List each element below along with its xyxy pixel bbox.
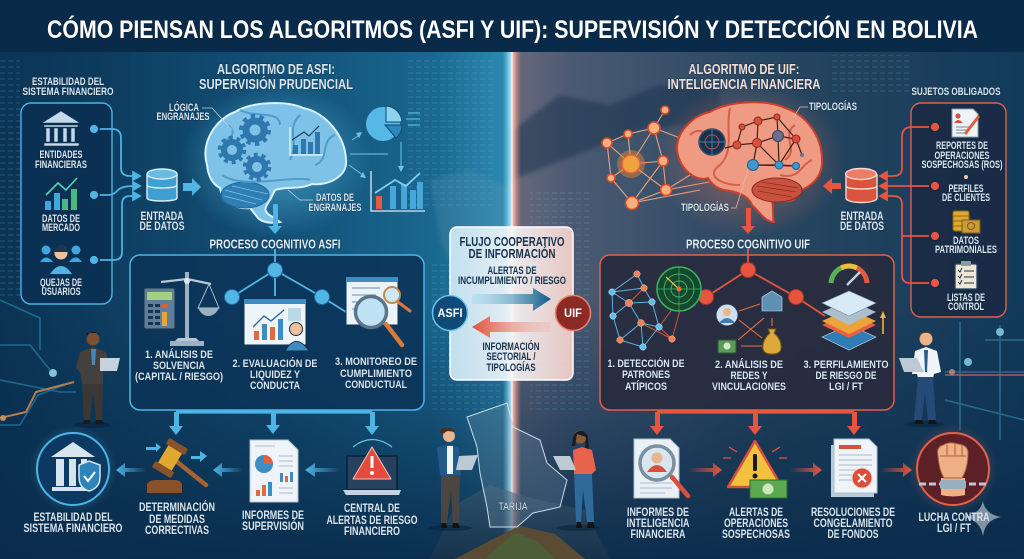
background: left blue half bbox=[0, 0, 512, 559]
label: central de alertas bbox=[326, 501, 418, 538]
heading: algoritmo de ASFI: ALGORITMO DE ASFI: bbox=[217, 62, 335, 78]
arrows: process to outputs ASFI bbox=[169, 412, 379, 435]
arrows: flow leftwards ASFI bbox=[116, 463, 340, 477]
icon: warning with banknote bbox=[723, 441, 787, 498]
title band bbox=[0, 0, 1024, 52]
icon: gears bbox=[220, 116, 270, 180]
label: informes de inteligencia: FINANCIERA bbox=[630, 527, 686, 541]
panel: proceso cognitivo UIF bbox=[600, 249, 894, 410]
label: evaluación de liquidez: LIQUIDEZ Y bbox=[250, 369, 301, 381]
label: listas de control bbox=[947, 292, 985, 313]
label: perfiles de clientes: PERFILES bbox=[948, 183, 984, 195]
label: detección de patrones: PATRONES bbox=[622, 369, 670, 381]
panel: flujo cooperativo de información: FLUJO COOPERATIVO bbox=[460, 235, 565, 249]
label: lucha contra LGI / FT bbox=[918, 510, 990, 535]
label: informes de supervisión: SUPERVISIÓN bbox=[242, 518, 304, 533]
label: datos de engranajes bbox=[308, 192, 362, 214]
arrows: process to outputs UIF bbox=[650, 412, 861, 435]
label: listas de control: LISTAS DE bbox=[947, 292, 985, 304]
label: perfilamiento de riesgo: 3. PERFILAMIENTO bbox=[804, 359, 889, 371]
label: perfiles de clientes bbox=[942, 183, 990, 204]
panel: flujo cooperativo de información: INCUMPLIMIENTO / RIESGO bbox=[458, 275, 566, 287]
icon: radar bbox=[699, 129, 725, 155]
brain: UIF bbox=[655, 82, 845, 238]
map: Bolivia outline with Tarija: TARIJA bbox=[498, 501, 528, 513]
arrow: database to brain UIF bbox=[823, 178, 841, 194]
label: resoluciones de congelamiento: DE FONDOS bbox=[828, 527, 878, 541]
icon: checklist clipboard bbox=[955, 261, 977, 289]
label: listas de control: CONTROL bbox=[948, 301, 984, 313]
label: estabilidad del sistema financiero bbox=[24, 510, 122, 535]
heading: algoritmo de ASFI: SUPERVISIÓN PRUDENCIAL bbox=[199, 75, 353, 93]
label: detección de patrones: ATÍPICOS bbox=[625, 380, 667, 393]
badge: ASFI bbox=[432, 296, 468, 330]
label: reportes de operaciones sospechosas: OPERACIONES bbox=[934, 150, 990, 162]
label: datos patrimoniales bbox=[935, 235, 997, 256]
label: quejas de usuarios bbox=[40, 277, 82, 298]
label: reportes de operaciones sospechosas: REPORTES DE bbox=[936, 140, 988, 152]
background: Bolivia silhouette upper bbox=[430, 170, 515, 300]
label: quejas de usuarios: QUEJAS DE bbox=[40, 277, 82, 289]
label: alertas de operaciones: SOSPECHOSAS bbox=[722, 527, 790, 541]
badge: ASFI: ASFI bbox=[438, 306, 462, 320]
map: Bolivia outline with Tarija bbox=[467, 403, 567, 527]
icon: database UIF bbox=[846, 168, 877, 202]
panel: proceso cognitivo ASFI bbox=[130, 249, 424, 410]
label: lucha contra LGI / FT: LGI / FT bbox=[937, 521, 972, 535]
label: determinación de medidas correctivas: DE MEDIDAS bbox=[149, 512, 205, 526]
label: detección de patrones bbox=[608, 357, 684, 393]
panel: flujo cooperativo de información: ALERTAS DE bbox=[488, 265, 536, 277]
icon: woman analyst ASFI bbox=[428, 428, 478, 531]
label: entrada de datos UIF bbox=[840, 209, 884, 233]
icon: network pattern and radar bbox=[609, 267, 701, 350]
arrow: brain to process ASFI bbox=[268, 204, 282, 234]
badge: UIF: UIF bbox=[564, 306, 582, 320]
icon: market chart bbox=[45, 178, 77, 210]
label: evaluación de liquidez: 2. EVALUACIÓN DE bbox=[232, 357, 318, 370]
icon: users bbox=[40, 245, 82, 274]
panel: fuentes ASFI bbox=[21, 103, 112, 304]
label: informes de inteligencia: INTELIGENCIA bbox=[626, 516, 690, 530]
background: faint data grids bbox=[0, 55, 910, 410]
network: brain nodes bbox=[725, 114, 804, 170]
label: determinación de medidas correctivas: CORRECTIVAS bbox=[145, 523, 209, 537]
label: análisis de redes: VINCULACIONES bbox=[712, 381, 786, 393]
background: left circuit lines bbox=[0, 300, 76, 425]
label: entrada de datos UIF: DE DATOS bbox=[840, 219, 884, 233]
background: mountain landscape bbox=[430, 485, 610, 559]
label: tipologías upper: TIPOLOGÍAS bbox=[809, 100, 857, 113]
background: right red-slate half bbox=[512, 0, 1024, 559]
label: análisis de redes bbox=[712, 358, 786, 393]
label: datos de engranajes: DATOS DE bbox=[316, 192, 354, 204]
heading: algoritmo de UIF: ALGORITMO DE UIF: bbox=[688, 62, 800, 78]
label: evaluación de liquidez: CONDUCTA bbox=[250, 380, 300, 392]
label: análisis de solvencia: SOLVENCIA bbox=[153, 360, 205, 372]
label: perfiles de clientes: DE CLIENTES bbox=[942, 192, 990, 204]
label: estabilidad del sistema financiero: SISTEMA FINANCIERO bbox=[24, 521, 122, 535]
icon: gavel bbox=[146, 438, 207, 493]
icon: report document bbox=[952, 109, 979, 137]
label: monitoreo de cumplimiento bbox=[335, 356, 417, 391]
arrow: brain to process UIF bbox=[741, 208, 755, 234]
icon: monitoring window and magnifiers bbox=[346, 277, 410, 345]
label: perfilamiento de riesgo: LGI / FT bbox=[829, 381, 863, 393]
label: análisis de solvencia bbox=[135, 348, 223, 383]
label: entidades financieras bbox=[35, 149, 87, 171]
badge: UIF bbox=[556, 296, 590, 330]
label: perfilamiento de riesgo: DE RIESGO DE bbox=[816, 370, 876, 382]
heading: algoritmo de UIF: INTELIGENCIA FINANCIERA bbox=[668, 77, 821, 93]
label: datos de mercado: MERCADO bbox=[42, 222, 80, 234]
label: tipologías lower: TIPOLOGÍAS bbox=[681, 201, 729, 214]
label: análisis de solvencia: (CAPITAL / RIESGO) bbox=[135, 371, 223, 383]
connector: process nodes bbox=[224, 249, 346, 312]
label: resoluciones de congelamiento bbox=[811, 505, 895, 541]
label: evaluación de liquidez bbox=[232, 357, 318, 392]
label: monitoreo de cumplimiento: CUMPLIMIENTO bbox=[340, 368, 412, 380]
icon: stability shield circle bbox=[29, 425, 117, 513]
label: entrada de datos ASFI: ENTRADA bbox=[140, 209, 184, 223]
heading: estabilidad del sistema financiero bbox=[22, 76, 114, 98]
label: estabilidad del sistema financiero: ESTABILIDAD DEL bbox=[34, 510, 112, 524]
icon: growth chart bbox=[349, 132, 425, 211]
icon: network links analysis bbox=[716, 291, 782, 354]
label: central de alertas: CENTRAL DE bbox=[344, 501, 400, 515]
label: entrada de datos UIF: ENTRADA bbox=[840, 209, 884, 223]
label: lógica engranajes: LÓGICA bbox=[169, 101, 199, 114]
label: lucha contra LGI / FT: LUCHA CONTRA bbox=[918, 510, 990, 524]
icon: bank bbox=[42, 111, 80, 146]
icon: risk gauge and layers bbox=[822, 266, 886, 350]
connector: process nodes bbox=[698, 249, 825, 316]
icon: coins and banknote bbox=[953, 211, 980, 233]
label: análisis de solvencia: 1. ANÁLISIS DE bbox=[145, 348, 213, 361]
panel: sujetos obligados bbox=[911, 103, 1006, 317]
arrow: UIF to ASFI bbox=[472, 316, 551, 338]
connectors: sources to database UIF bbox=[880, 122, 940, 288]
arrows: flow rightwards UIF bbox=[688, 463, 912, 477]
label: lógica engranajes: ENGRANAJES bbox=[156, 111, 210, 123]
label: informes de supervisión bbox=[242, 508, 304, 533]
panel: flujo cooperativo de información: DE INFORMACIÓN bbox=[468, 246, 556, 261]
label: quejas de usuarios: USUARIOS bbox=[42, 286, 80, 298]
heading: proceso cognitivo ASFI: PROCESO COGNITIVO ASFI bbox=[210, 236, 340, 252]
panel: flujo cooperativo de información: TIPOLOGÍAS bbox=[486, 361, 536, 374]
label: informes de inteligencia bbox=[626, 505, 690, 541]
label: resoluciones de congelamiento: CONGELAMIENTO bbox=[814, 516, 892, 530]
background: right data lines bbox=[945, 322, 1024, 440]
label: entrada de datos ASFI bbox=[140, 209, 184, 233]
label: monitoreo de cumplimiento: CONDUCTUAL bbox=[345, 379, 407, 391]
background: right mountains bbox=[512, 85, 720, 180]
label: monitoreo de cumplimiento: 3. MONITOREO DE bbox=[335, 356, 417, 368]
icon: evaluation window bbox=[244, 299, 309, 351]
brain: ASFI bbox=[181, 82, 371, 238]
icon: woman analyst UIF bbox=[553, 430, 600, 531]
label: entrada de datos ASFI: DE DATOS bbox=[140, 219, 184, 233]
label: datos patrimoniales: DATOS bbox=[953, 235, 979, 247]
label: determinación de medidas correctivas bbox=[139, 499, 215, 537]
label: análisis de redes: 2. ANÁLISIS DE bbox=[715, 358, 783, 371]
icon: person analyst right bbox=[899, 332, 944, 427]
label: datos patrimoniales: PATRIMONIALES bbox=[935, 244, 997, 256]
arrow: database to brain ASFI bbox=[183, 178, 201, 196]
label: reportes de operaciones sospechosas bbox=[922, 140, 1003, 171]
panel: flujo cooperativo de información bbox=[450, 227, 573, 380]
decoration: sparkle bbox=[964, 501, 1001, 536]
heading: algoritmo de ASFI bbox=[199, 62, 353, 93]
label: central de alertas: FINANCIERO bbox=[344, 524, 400, 538]
heading: estabilidad del sistema financiero: SISTEMA FINANCIERO bbox=[22, 86, 114, 98]
icon: supervision report document bbox=[250, 440, 298, 502]
icon: calculator and scale bbox=[144, 272, 219, 346]
label: entidades financieras: ENTIDADES bbox=[40, 149, 82, 161]
label: informes de inteligencia: INFORMES DE bbox=[627, 505, 689, 519]
panel: flujo cooperativo de información: SECTORIAL / bbox=[486, 351, 536, 363]
heading: proceso cognitivo UIF: PROCESO COGNITIVO UIF bbox=[686, 236, 810, 252]
label: alertas de operaciones: ALERTAS DE bbox=[729, 505, 783, 519]
label: datos de engranajes: ENGRANAJES bbox=[308, 202, 362, 214]
icon: pie chart bbox=[366, 106, 420, 141]
icon: alert laptop bbox=[343, 440, 401, 495]
icon: fist breaking chains bbox=[908, 424, 998, 514]
icon: database ASFI bbox=[147, 169, 177, 201]
label: detección de patrones: 1. DETECCIÓN DE bbox=[608, 357, 684, 370]
panel: flujo cooperativo de información: INFORMACIÓN bbox=[482, 340, 540, 353]
heading: algoritmo de UIF bbox=[668, 62, 821, 93]
label: alertas de operaciones: OPERACIONES bbox=[724, 516, 788, 530]
icon: intelligence report bbox=[634, 439, 688, 498]
label: alertas de operaciones bbox=[722, 505, 790, 541]
icon: person analyst left bbox=[74, 332, 120, 428]
label: informes de supervisión: INFORMES DE bbox=[242, 508, 304, 522]
icon: brain bar chart bbox=[290, 126, 323, 155]
label: análisis de redes: REDES Y bbox=[730, 370, 768, 382]
label: resoluciones de congelamiento: RESOLUCIONES DE bbox=[811, 505, 895, 519]
icon: freezing resolution bbox=[831, 439, 877, 497]
label: determinación de medidas correctivas: DETERMINACIÓN bbox=[139, 499, 215, 514]
connectors: sources to database ASFI bbox=[89, 124, 140, 265]
label: entidades financieras: FINANCIERAS bbox=[35, 159, 87, 171]
label: lógica engranajes bbox=[156, 101, 210, 123]
label: datos de mercado bbox=[42, 213, 80, 234]
label: perfilamiento de riesgo bbox=[804, 359, 889, 393]
heading: estabilidad del sistema financiero: ESTABILIDAD DEL bbox=[32, 76, 104, 88]
label: central de alertas: ALERTAS DE RIESGO bbox=[326, 513, 418, 527]
arrow: ASFI to UIF bbox=[472, 288, 551, 311]
background: centre beam bbox=[503, 52, 521, 559]
network: external nodes UIF bbox=[602, 106, 720, 210]
label: datos de mercado: DATOS DE bbox=[42, 213, 80, 225]
